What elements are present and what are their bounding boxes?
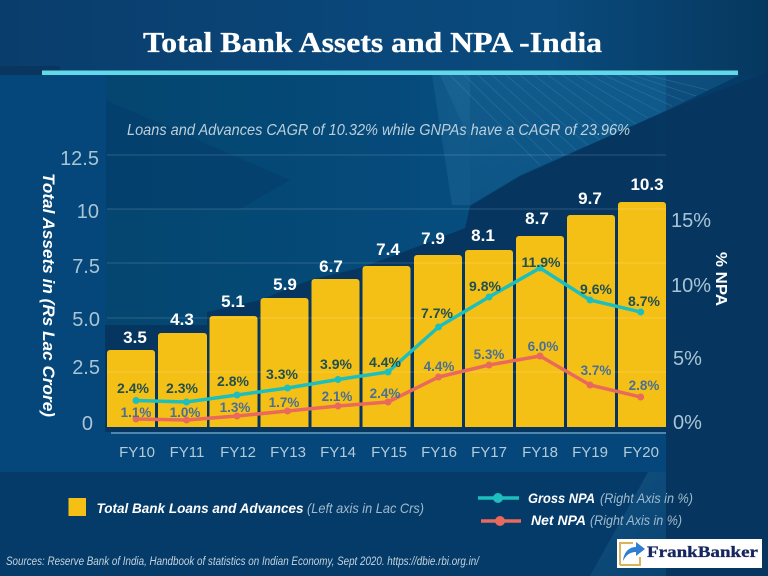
left axis title: Total Assets in (Rs Lac Crore): [39, 173, 58, 417]
bar values: 9.7: [578, 189, 602, 208]
gross NPA labels: 2.3%: [166, 380, 199, 396]
x axis labels: FY10: [119, 444, 155, 461]
bar values: 8.1: [471, 226, 495, 245]
line: gross NPA: [117, 254, 661, 406]
x axis labels: FY13: [270, 444, 306, 461]
gross NPA labels: 11.9%: [522, 254, 561, 270]
right axis labels: [671, 210, 711, 434]
net NPA labels: 6.0%: [528, 339, 558, 354]
legend: gross NPA: Gross NPA: [528, 490, 595, 506]
net NPA labels: 4.4%: [424, 359, 454, 374]
left axis labels: 0: [82, 413, 93, 435]
bar values: 6.7: [319, 257, 343, 276]
net NPA labels: 2.4%: [370, 386, 400, 401]
gross NPA labels: 3.9%: [320, 356, 353, 372]
bar values: 4.3: [170, 310, 194, 329]
legend: bars: [68, 498, 424, 516]
right axis title: % NPA: [712, 252, 729, 306]
net NPA labels: 5.3%: [474, 347, 504, 362]
logo: FrankBanker: FrankBanker: [647, 544, 758, 561]
left axis labels: [60, 148, 100, 435]
bar values: [123, 175, 664, 347]
right axis labels: 0%: [673, 412, 702, 434]
left axis labels: 2.5: [72, 357, 100, 379]
title: Total Bank Assets and NPA -India: [143, 27, 603, 59]
legend: net NPA: (Right Axis in %): [590, 512, 682, 528]
left axis labels: 5.0: [72, 309, 100, 331]
x axis labels: FY14: [320, 444, 356, 461]
bar values: 7.9: [421, 229, 445, 248]
gross NPA labels: 8.7%: [628, 293, 661, 309]
net NPA labels: 2.1%: [322, 389, 352, 404]
bar values: 8.7: [525, 209, 549, 228]
gross NPA labels: 2.4%: [117, 380, 150, 396]
bar values: 7.4: [376, 240, 400, 259]
bars: [107, 202, 666, 427]
bar chart: [107, 155, 666, 433]
bar values: 3.5: [123, 328, 147, 347]
net NPA labels: 1.3%: [220, 400, 250, 415]
gross NPA labels: 7.7%: [421, 305, 454, 321]
x axis labels: FY15: [371, 444, 407, 461]
legend: gross NPA: (Right Axis in %): [600, 490, 693, 506]
legend: bars: Total Bank Loans and Advances: [96, 500, 304, 516]
title rule: [42, 70, 738, 75]
net NPA labels: 1.0%: [170, 405, 200, 420]
legend: net NPA: Net NPA: [531, 512, 586, 528]
bar values: 10.3: [630, 175, 664, 194]
x axis labels: FY18: [522, 444, 558, 461]
gross NPA labels: 3.3%: [266, 366, 299, 382]
x axis labels: FY12: [220, 444, 256, 461]
line: net NPA: [121, 339, 659, 424]
net NPA labels: 3.7%: [581, 363, 611, 378]
left axis labels: 7.5: [72, 256, 100, 278]
bar values: 5.1: [221, 292, 245, 311]
legend: gross NPA: [478, 490, 693, 506]
gross NPA labels: 9.6%: [580, 281, 613, 297]
net NPA labels: 1.7%: [269, 395, 299, 410]
source note: Sources: Reserve Bank of India, Handbook of statistics on Indian Economy, Sept 2020. https://dbie.rbi.org.in/: [6, 556, 481, 568]
x axis labels: FY19: [572, 444, 608, 461]
x axis labels: FY11: [170, 444, 204, 461]
gross NPA labels: [117, 254, 661, 396]
right axis labels: 5%: [673, 348, 702, 370]
x axis labels: FY20: [623, 444, 659, 461]
net NPA labels: 1.1%: [121, 405, 151, 420]
right axis labels: 15%: [671, 210, 711, 232]
gross NPA labels: 4.4%: [369, 354, 402, 370]
gross NPA labels: 2.8%: [217, 373, 250, 389]
subtitle: Loans and Advances CAGR of 10.32% while GNPAs have a CAGR of 23.96%: [127, 122, 630, 139]
legend: net NPA: [481, 512, 682, 528]
net NPA labels: [121, 339, 659, 420]
gross NPA labels: 9.8%: [469, 278, 502, 294]
left axis labels: 10: [77, 201, 99, 223]
x axis labels: FY16: [421, 444, 457, 461]
bar values: 5.9: [273, 275, 297, 294]
legend: bars: (Left axis in Lac Crs): [307, 500, 424, 516]
left axis labels: 12.5: [60, 148, 99, 170]
right axis labels: 10%: [671, 275, 711, 297]
x axis labels: FY17: [471, 444, 507, 461]
net NPA labels: 2.8%: [629, 378, 659, 393]
x axis labels: [119, 444, 659, 461]
logo: FrankBanker: [617, 539, 762, 568]
